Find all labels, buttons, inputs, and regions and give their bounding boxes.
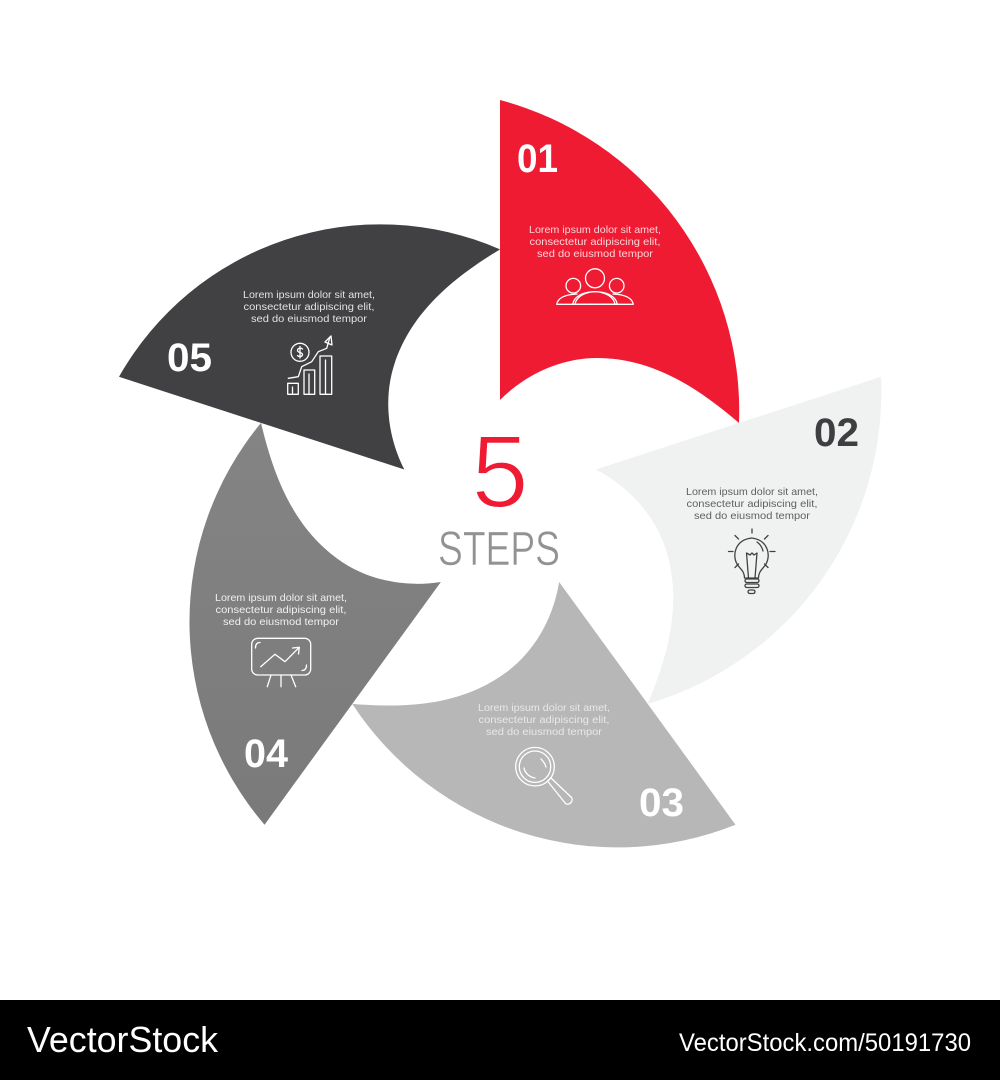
number 01: 01 [517, 137, 558, 181]
text block 05 [243, 289, 375, 325]
number 04: 04 [244, 732, 289, 776]
panel shape 04 [71, 423, 454, 825]
panel: step 01 [500, 100, 739, 423]
text block 01: consectetur adipiscing elit, [530, 236, 660, 248]
icon: magnifying glass [516, 747, 572, 804]
number 02: 02 [814, 411, 859, 455]
panel: step 04 [71, 423, 454, 825]
text block 05: Lorem ipsum dolor sit amet, [243, 289, 375, 301]
text block 01: Lorem ipsum dolor sit amet, [529, 224, 661, 236]
icon: group of people [557, 269, 633, 304]
panel shape 05 [119, 148, 500, 477]
text block 02: sed do eiusmod tempor [694, 510, 811, 522]
icon: growth chart with coin [288, 336, 332, 394]
text block 03: sed do eiusmod tempor [486, 726, 603, 738]
text block 05: consectetur adipiscing elit, [244, 301, 374, 313]
number 05: 05 [167, 336, 212, 380]
big number 5: 5 [471, 414, 529, 529]
text block 03: consectetur adipiscing elit, [478, 714, 610, 726]
watermark logo text: VectorStock [27, 1019, 219, 1060]
panel: step 02 [574, 377, 955, 704]
number 03: 03 [639, 781, 684, 825]
panel shape 02 [574, 377, 955, 704]
text block 04 [215, 592, 347, 628]
text block 04: Lorem ipsum dolor sit amet, [215, 592, 347, 604]
panel: step 05 [119, 148, 500, 477]
text block 04: sed do eiusmod tempor [223, 616, 340, 628]
text block 02 [686, 486, 818, 522]
text block 02: Lorem ipsum dolor sit amet, [686, 486, 818, 498]
watermark url text: VectorStock.com/50191730 [679, 1029, 971, 1057]
panel: step 03 [352, 563, 735, 965]
panel shape 01 [500, 100, 739, 423]
text block 01: sed do eiusmod tempor [537, 248, 654, 260]
text block 02: consectetur adipiscing elit, [686, 498, 818, 510]
icon: presentation board [252, 638, 311, 687]
icon: light bulb [728, 529, 775, 594]
center title [438, 414, 560, 576]
panel shape 03 [352, 563, 735, 965]
text block 05: sed do eiusmod tempor [251, 313, 368, 325]
watermark band [0, 1000, 1000, 1080]
text block 03: Lorem ipsum dolor sit amet, [478, 702, 610, 714]
text block 04: consectetur adipiscing elit, [216, 604, 346, 616]
word STEPS: STEPS [438, 523, 560, 576]
text block 01 [529, 224, 661, 260]
text block 03 [478, 702, 610, 738]
